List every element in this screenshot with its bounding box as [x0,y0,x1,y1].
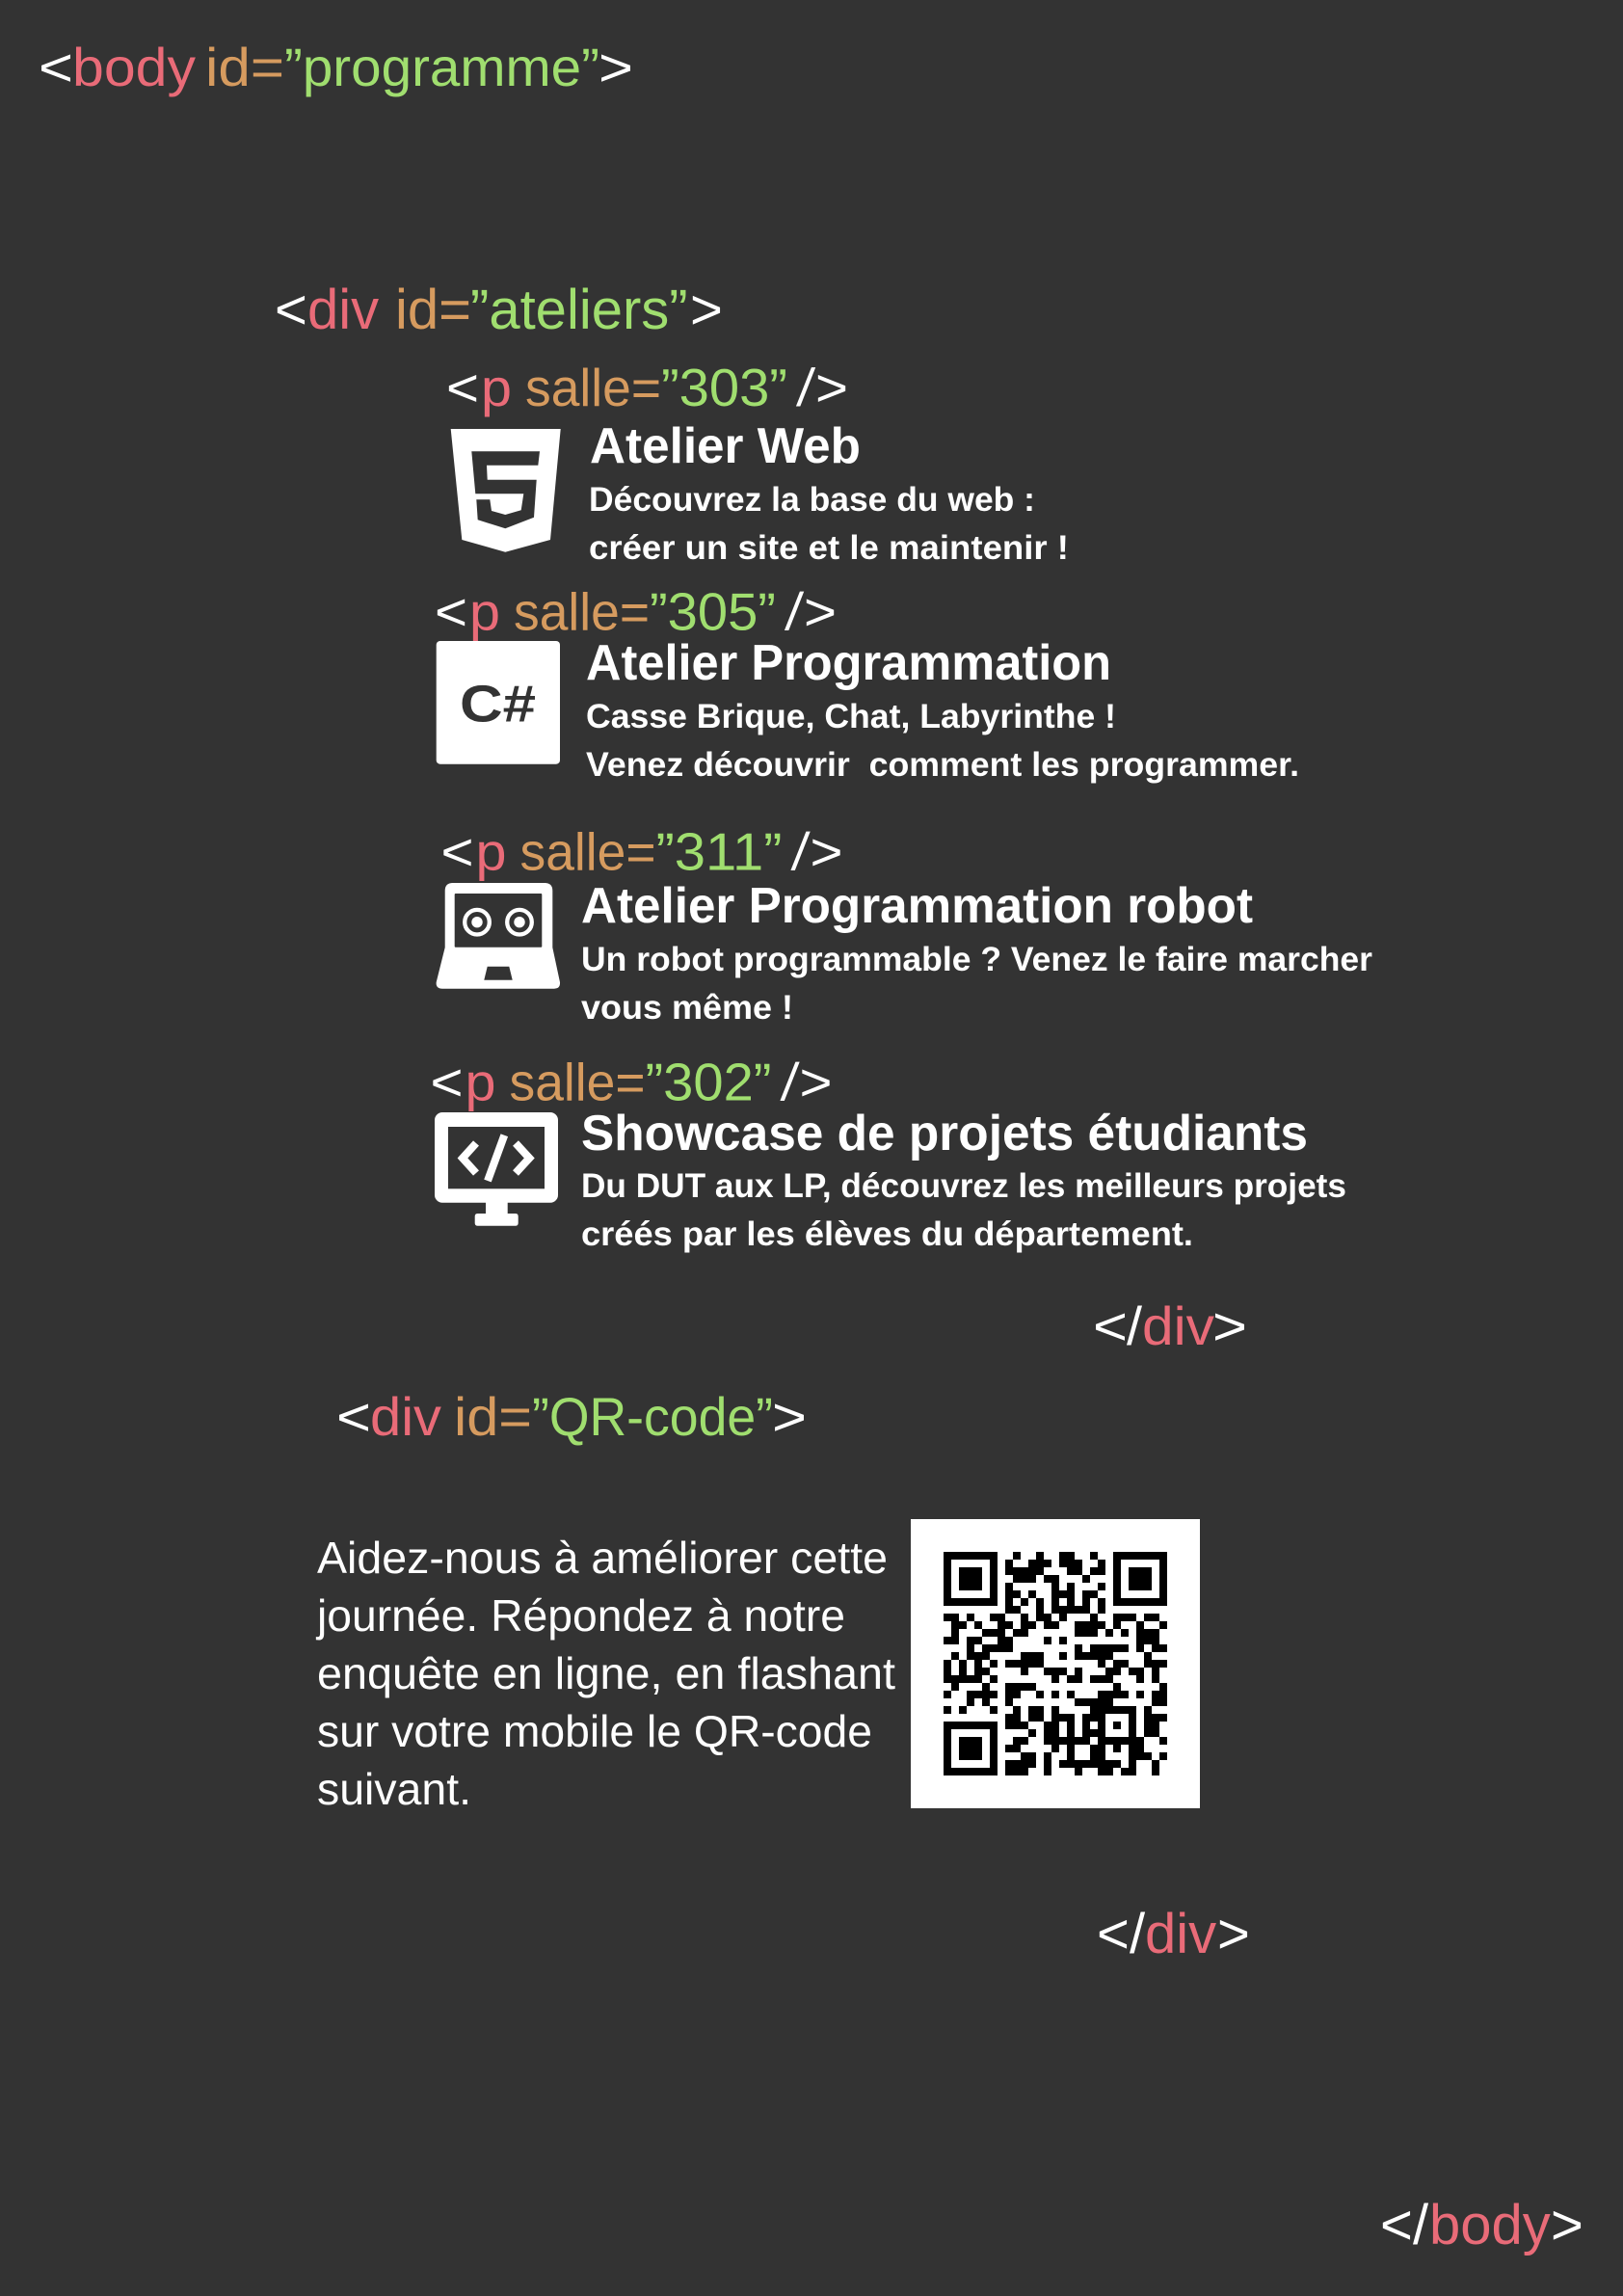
opening tag: body programme: ”programme” [284,37,599,97]
qr code [911,1519,1200,1808]
heading: atelier programmation: Atelier Programmation [586,635,1111,691]
icon: c sharp: C# [460,675,536,733]
closing tag: div ateliers: / [1127,1295,1142,1356]
workshop: atelier web [446,358,1069,567]
heading: showcase de projets: Showcase de projets étudiants [581,1106,1308,1161]
room tag 303: salle= [525,358,661,417]
opening tag: div ateliers: ”ateliers” [470,279,688,341]
icon: c sharp [437,641,560,764]
closing tag: body [1380,2194,1583,2256]
closing tag: body: / [1413,2194,1429,2256]
description: atelier programmation robot [581,941,1372,1027]
room tag 311: salle= [520,822,655,882]
opening tag: div qr-code: div [370,1386,441,1447]
opening tag: div qr-code: ”QR-code” [532,1386,773,1447]
closing tag: div qr-code [1097,1903,1250,1965]
room tag 305: p [469,581,500,641]
description: atelier programmation robot: Un robot programmable ? Venez le faire marcher [581,941,1372,978]
opening tag: body programme: < [39,37,73,97]
room tag 305 [435,581,837,641]
opening tag: div qr-code: > [772,1386,807,1447]
opening tag: body programme: body [72,37,196,97]
room tag 303: ”303” [661,358,787,417]
room tag 303: / [795,358,817,417]
room tag 311: / [789,822,812,882]
description: atelier programmation robot: vous même ! [581,989,793,1027]
closing tag: body: body [1429,2194,1551,2256]
room tag 302: salle= [509,1053,646,1112]
room tag 305: < [435,581,467,641]
workshop: showcase de projets [430,1053,1346,1253]
closing tag: div ateliers: < [1093,1295,1128,1356]
closing tag: div ateliers: > [1212,1295,1247,1356]
opening tag: div qr-code [336,1386,807,1447]
text block: qr survey invitation: journée. Répondez à notre [315,1590,845,1641]
description: atelier programmation [586,698,1299,784]
room tag 305: > [804,581,837,641]
opening tag: div ateliers: id= [395,279,471,341]
room tag 302: p [465,1053,495,1112]
opening tag: body programme: id= [205,37,284,97]
room tag 302: < [430,1053,463,1112]
opening tag: div ateliers [275,279,723,341]
closing tag: div qr-code: / [1130,1903,1146,1965]
opening tag: div qr-code: < [336,1386,371,1447]
closing tag: div qr-code: div [1145,1903,1216,1965]
closing tag: div ateliers [1093,1295,1247,1356]
description: atelier web [589,481,1069,567]
opening tag: div qr-code: id= [454,1386,532,1447]
heading: atelier web: Atelier Web [590,418,861,474]
description: atelier web: créer un site et le maintenir ! [589,529,1069,567]
heading: atelier programmation robot: Atelier Programmation robot [581,878,1253,934]
room tag 311: ”311” [655,822,783,882]
room tag 305: salle= [514,581,650,641]
opening tag: div ateliers: div [307,279,379,341]
description: atelier programmation: Venez découvrir comment les programmer. [586,746,1299,784]
icon: html5 shield [451,429,561,552]
text block: qr survey invitation: suivant. [317,1764,471,1814]
room tag 302: ”302” [646,1053,771,1112]
closing tag: div qr-code: < [1097,1903,1130,1965]
closing tag: div qr-code: > [1217,1903,1250,1965]
room tag 311: > [810,822,842,882]
opening tag: body programme: > [599,37,633,97]
room tag 302 [430,1053,833,1112]
opening tag: div ateliers: > [690,279,723,341]
room tag 311: < [441,822,474,882]
opening tag: body programme [39,37,633,97]
room tag 303: p [481,358,512,417]
text block: qr survey invitation: sur votre mobile le QR-code [317,1706,872,1756]
description: atelier web: Découvrez la base du web : [589,481,1035,519]
room tag 303: < [446,358,479,417]
closing tag: body: > [1551,2194,1583,2256]
workshop: atelier programmation robot [437,822,1372,1027]
room tag 305: / [784,581,806,641]
closing tag: div ateliers: div [1142,1295,1214,1356]
description: showcase de projets [581,1167,1346,1253]
description: showcase de projets: Du DUT aux LP, découvrez les meilleurs projets [581,1167,1346,1205]
text block: qr survey invitation: Aidez-nous à améliorer cette [317,1533,888,1583]
text block: qr survey invitation: enquête en ligne, en flashant [317,1648,895,1698]
closing tag: body: < [1380,2194,1413,2256]
room tag 311 [441,822,842,882]
text block: qr survey invitation [315,1533,895,1814]
description: atelier programmation: Casse Brique, Chat, Labyrinthe ! [586,698,1116,735]
room tag 302: / [779,1053,802,1112]
workshop: atelier programmation [435,581,1299,784]
opening tag: div ateliers: < [275,279,307,341]
room tag 311: p [476,822,507,882]
room tag 303 [446,358,848,417]
room tag 305: ”305” [650,581,776,641]
icon: robot laptop [437,883,560,989]
room tag 303: > [815,358,848,417]
room tag 302: > [800,1053,833,1112]
description: showcase de projets: créés par les élèves du département. [581,1215,1193,1253]
icon: code monitor [435,1112,558,1226]
